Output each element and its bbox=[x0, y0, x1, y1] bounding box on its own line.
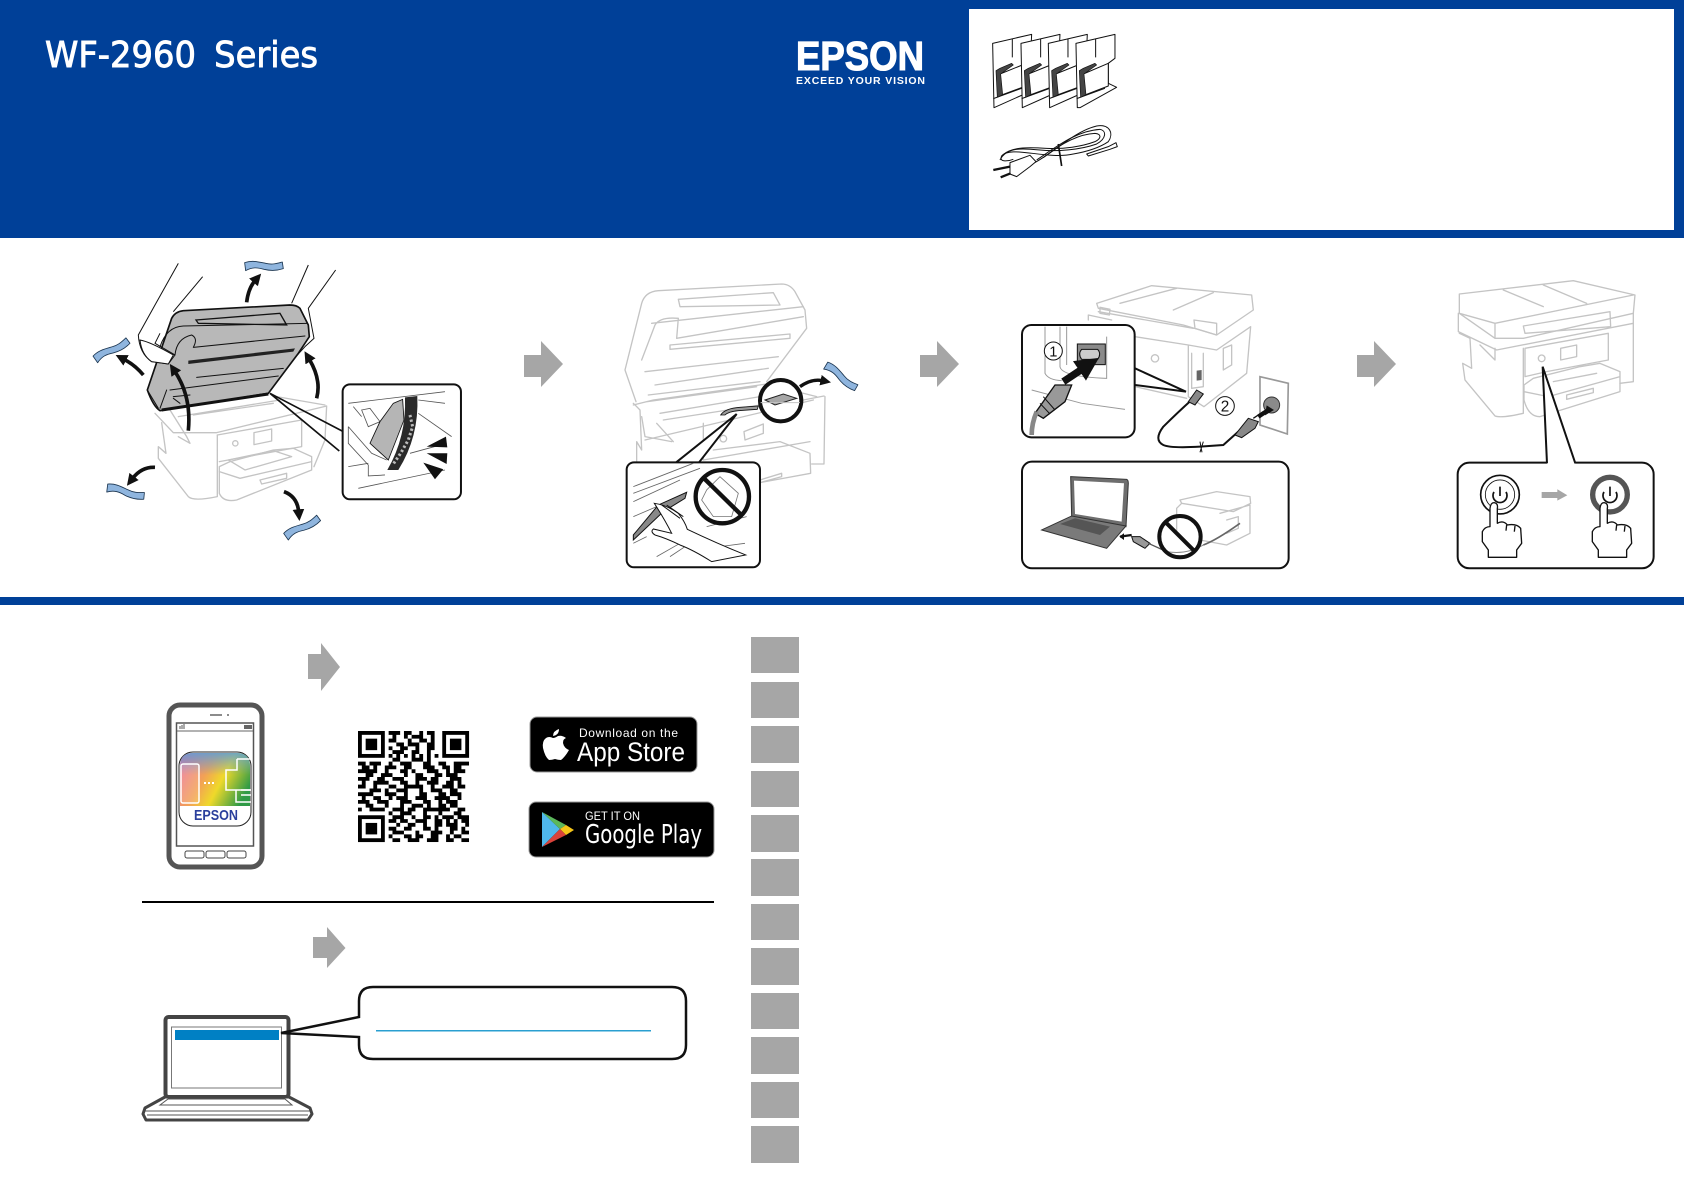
panel: step 1 remove tape bbox=[92, 261, 461, 541]
power cord and plug bbox=[1158, 377, 1288, 452]
section divider line bbox=[142, 901, 714, 903]
icon: smartphone with app bbox=[169, 705, 262, 867]
printer rear view bbox=[1088, 286, 1253, 407]
icon: play triangle bbox=[542, 812, 574, 847]
gray cable strip bbox=[721, 406, 758, 415]
panel: step 4 press power bbox=[1458, 281, 1654, 568]
icon: apple bbox=[543, 729, 569, 760]
arrow: step 3 to 4 bbox=[1357, 341, 1396, 387]
inset: no usb connection bbox=[1022, 462, 1289, 568]
badge: App Store: Download on the bbox=[579, 726, 678, 740]
printer front view bbox=[1458, 281, 1635, 417]
arrow: step 2 to 3 bbox=[920, 341, 959, 387]
circled tape location bbox=[760, 380, 801, 421]
inset: power inlet: 1 bbox=[1049, 344, 1057, 360]
hands bbox=[138, 263, 336, 364]
arrow: step 1 to 2 bbox=[524, 341, 563, 387]
header blue band bbox=[0, 0, 1684, 238]
panel: step 2 do not touch cable bbox=[625, 284, 859, 567]
title: WF-2960 Series bbox=[45, 35, 318, 76]
numbered grey language tabs bbox=[751, 637, 799, 1163]
inset: do not touch bbox=[627, 414, 760, 567]
browser title bar bbox=[175, 1030, 279, 1040]
app icon: EPSON bbox=[194, 807, 238, 824]
icon: ink cartridge packs bbox=[993, 34, 1117, 108]
app icon bbox=[179, 752, 251, 826]
icon: laptop bbox=[143, 1017, 312, 1120]
inset: power button pressed bbox=[1458, 367, 1654, 568]
badge: Google Play bbox=[529, 802, 714, 857]
printer body outline bbox=[155, 397, 327, 501]
blue tapes bbox=[92, 261, 322, 541]
panel: box contents bbox=[969, 9, 1674, 230]
power cord and plug: 2 bbox=[1221, 399, 1229, 416]
lid inner bars bbox=[196, 313, 287, 325]
inset: power inlet bbox=[1022, 325, 1186, 437]
badge: Google Play: GET IT ON bbox=[585, 809, 640, 823]
Epson logo: EXCEED YOUR VISION bbox=[796, 75, 925, 87]
panel: step 3 connect power, no usb bbox=[1022, 286, 1289, 568]
callout: website url bbox=[281, 987, 686, 1059]
callout inset: latch bbox=[270, 384, 461, 499]
badge: App Store: App Store bbox=[577, 737, 685, 767]
Epson logo: EPSON bbox=[796, 33, 924, 79]
scanner lid raised bbox=[147, 305, 309, 411]
QR code bbox=[358, 731, 473, 842]
removal arrows bbox=[124, 281, 318, 512]
arrow and tape bbox=[800, 361, 859, 392]
icon: power cord bbox=[993, 126, 1117, 177]
printer with lid open bbox=[625, 284, 825, 490]
arrow: website section bbox=[313, 927, 346, 968]
badge: Google Play: Google Play bbox=[585, 820, 702, 850]
divider blue band bbox=[0, 597, 1684, 605]
badge: App Store bbox=[530, 717, 697, 772]
arrow: app section bbox=[308, 643, 340, 691]
